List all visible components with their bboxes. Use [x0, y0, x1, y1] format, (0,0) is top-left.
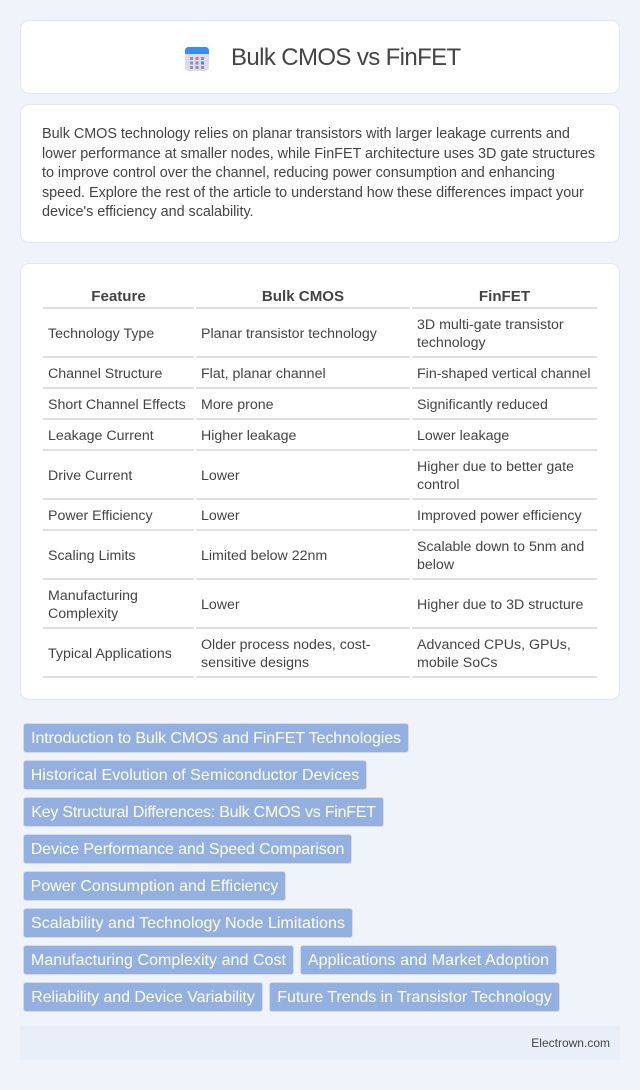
- footer: [20, 1026, 620, 1060]
- topic tags: Scalability and Technology Node Limitations: [31, 915, 345, 932]
- comparison table: Lower: [201, 468, 240, 484]
- comparison table: Lower leakage: [417, 428, 509, 444]
- comparison table: Advanced CPUs, GPUs,: [417, 637, 571, 653]
- intro text: [42, 126, 595, 220]
- comparison table: Scaling Limits: [48, 548, 136, 564]
- intro text: to improve control over the channel, reducing power consumption and enhancing: [42, 165, 555, 181]
- topic tags: Introduction to Bulk CMOS and FinFET Technologies: [31, 730, 401, 747]
- comparison table: Fin-shaped vertical channel: [417, 366, 590, 382]
- topic tags: Reliability and Device Variability: [31, 989, 255, 1006]
- comparison table: mobile SoCs: [417, 655, 497, 671]
- comparison table: Typical Applications: [48, 646, 172, 662]
- comparison table: Flat, planar channel: [201, 366, 326, 382]
- comparison table: Higher due to 3D structure: [417, 597, 583, 613]
- comparison table: Higher due to better gate: [417, 459, 574, 475]
- comparison table: Complexity: [48, 606, 118, 622]
- comparison table: sensitive designs: [201, 655, 309, 671]
- comparison table: Short Channel Effects: [48, 397, 186, 413]
- intro text: speed. Explore the rest of the article to understand how these differences impact your: [42, 185, 584, 201]
- comparison table: Feature: [91, 288, 146, 305]
- comparison table: Older process nodes, cost-: [201, 637, 371, 653]
- comparison table: Leakage Current: [48, 428, 154, 444]
- topic tags: [23, 723, 560, 1012]
- intro text: Bulk CMOS technology relies on planar transistors with larger leakage currents and: [42, 126, 570, 142]
- comparison table: 3D multi-gate transistor: [417, 317, 564, 333]
- topic tags: Key Structural Differences: Bulk CMOS vs FinFET: [31, 804, 376, 821]
- intro panel: [20, 104, 620, 243]
- comparison table: technology: [417, 335, 486, 351]
- topic tags: Future Trends in Transistor Technology: [277, 989, 552, 1006]
- comparison table: control: [417, 477, 460, 493]
- table panel: [20, 263, 620, 700]
- comparison table: Improved power efficiency: [417, 508, 582, 524]
- comparison table: Drive Current: [48, 468, 132, 484]
- comparison table: Scalable down to 5nm and: [417, 539, 584, 555]
- comparison table: Power Efficiency: [48, 508, 153, 524]
- comparison table: Manufacturing: [48, 588, 138, 604]
- comparison table: Higher leakage: [201, 428, 296, 444]
- topic tags: Power Consumption and Efficiency: [31, 878, 278, 895]
- comparison table: Lower: [201, 597, 240, 613]
- comparison table: Limited below 22nm: [201, 548, 327, 564]
- topic tags: Historical Evolution of Semiconductor Devices: [31, 767, 359, 784]
- comparison table: FinFET: [479, 288, 530, 305]
- comparison table: Bulk CMOS: [262, 288, 344, 305]
- comparison table: More prone: [201, 397, 274, 413]
- header panel: [20, 20, 620, 94]
- comparison table: Planar transistor technology: [201, 326, 377, 342]
- topic tags: Device Performance and Speed Comparison: [31, 841, 344, 858]
- topic tags: Applications and Market Adoption: [308, 952, 549, 969]
- comparison table: Technology Type: [48, 326, 154, 342]
- title: Bulk CMOS vs FinFET: [231, 44, 461, 71]
- comparison table: Significantly reduced: [417, 397, 548, 413]
- comparison table: Channel Structure: [48, 366, 162, 382]
- topic tags: Manufacturing Complexity and Cost: [31, 952, 286, 969]
- comparison table: below: [417, 557, 454, 573]
- footer credit: Electrown.com: [531, 1036, 610, 1050]
- comparison table: [43, 288, 597, 678]
- intro text: lower performance at smaller nodes, while FinFET architecture uses 3D gate structures: [42, 146, 595, 162]
- icon: calendar: [185, 47, 209, 71]
- comparison table: Lower: [201, 508, 240, 524]
- intro text: device's efficiency and scalability.: [42, 204, 254, 220]
